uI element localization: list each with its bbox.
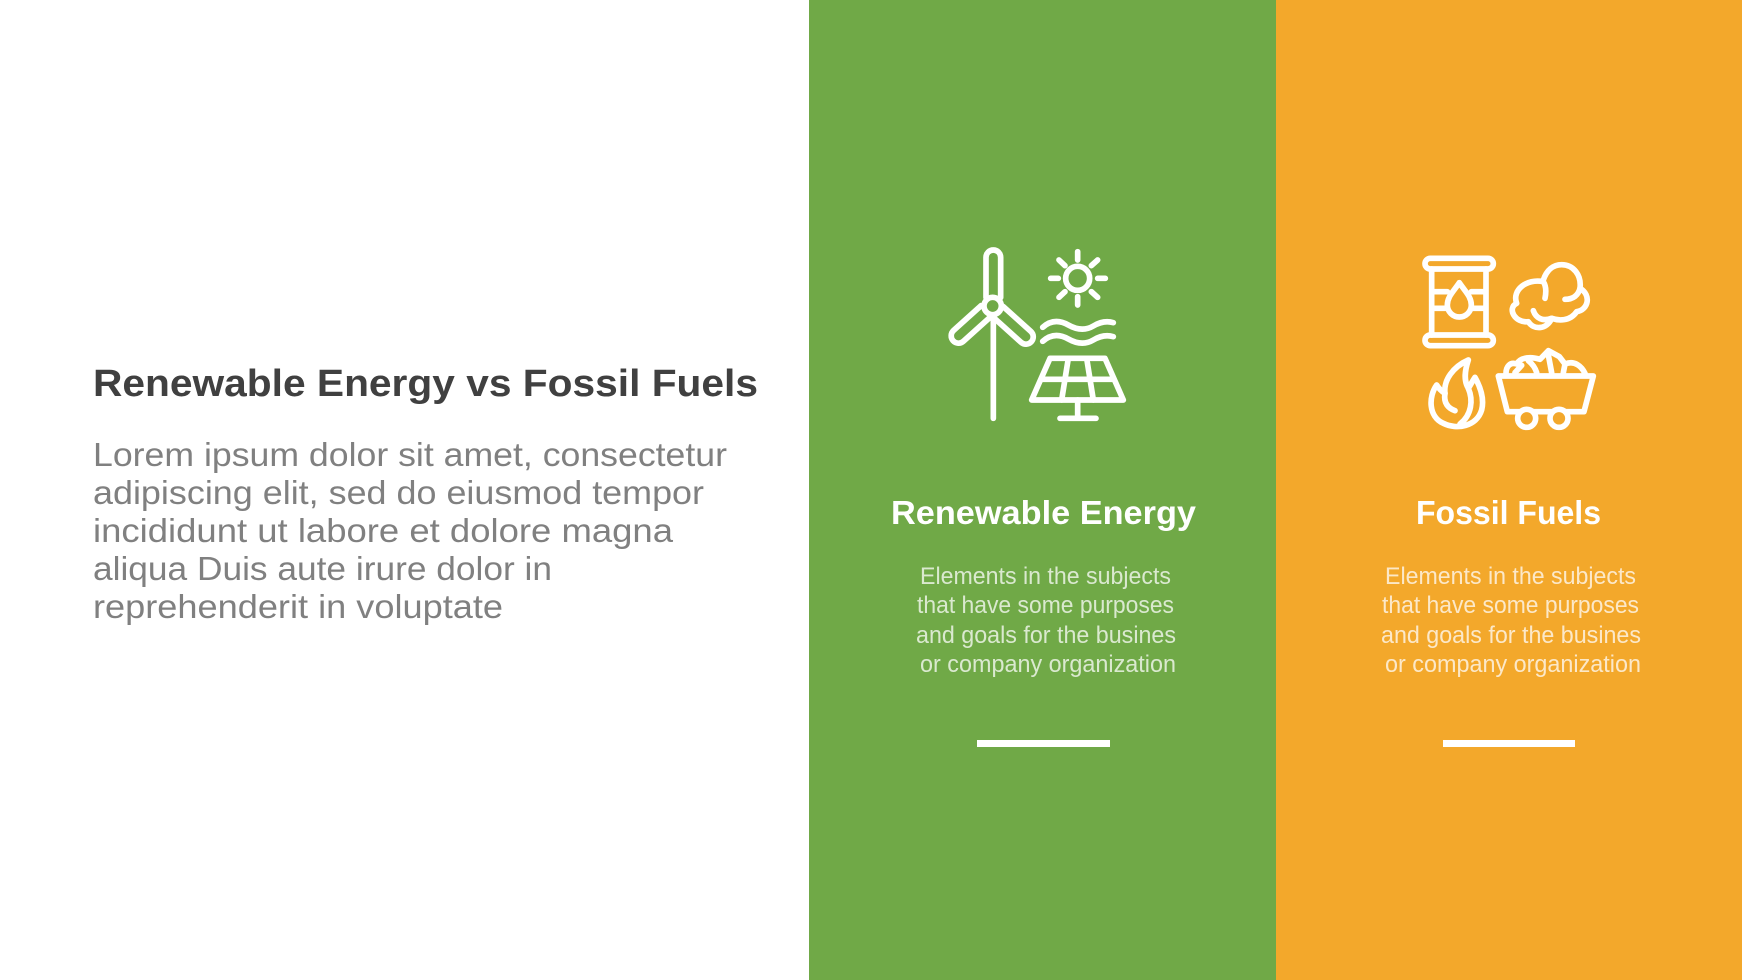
panel: fossil fuels [1276, 0, 1742, 980]
text block: fossil fuels description: that have some purposes [1382, 592, 1639, 619]
text block: fossil fuels description: or company organization [1385, 651, 1641, 678]
icon: oil barrel, smoke, flame and coal cart [1425, 258, 1593, 427]
underline bar: renewable energy [977, 740, 1110, 747]
text block: intro paragraph: Lorem ipsum dolor sit amet, consectetur [93, 436, 727, 473]
panel: renewable energy [809, 0, 1276, 980]
heading: renewable energy: Renewable Energy [891, 494, 1197, 531]
text block: fossil fuels description: Elements in the subjects [1385, 563, 1636, 590]
text block: renewable energy description: or company organization [920, 651, 1176, 678]
text block: renewable energy description: Elements in the subjects [920, 563, 1171, 590]
icon: wind turbine, sun, waves and solar panel [948, 250, 1123, 418]
text block: renewable energy description [916, 563, 1176, 678]
text block: intro paragraph: reprehenderit in voluptate [93, 588, 503, 625]
title: Renewable Energy vs Fossil Fuels [93, 363, 758, 405]
text block: fossil fuels description: and goals for the busines [1381, 622, 1641, 649]
text block: fossil fuels description [1381, 563, 1641, 678]
text block: intro paragraph: incididunt ut labore et dolore magna [93, 512, 674, 549]
text block: intro paragraph: aliqua Duis aute irure dolor in [93, 550, 552, 587]
underline bar: fossil fuels [1443, 740, 1575, 747]
text block: intro paragraph [93, 436, 727, 625]
text block: renewable energy description: that have some purposes [917, 592, 1174, 619]
text block: intro paragraph: adipiscing elit, sed do eiusmod tempor [93, 474, 704, 511]
text block: renewable energy description: and goals for the busines [916, 622, 1176, 649]
heading: fossil fuels: Fossil Fuels [1416, 494, 1601, 531]
